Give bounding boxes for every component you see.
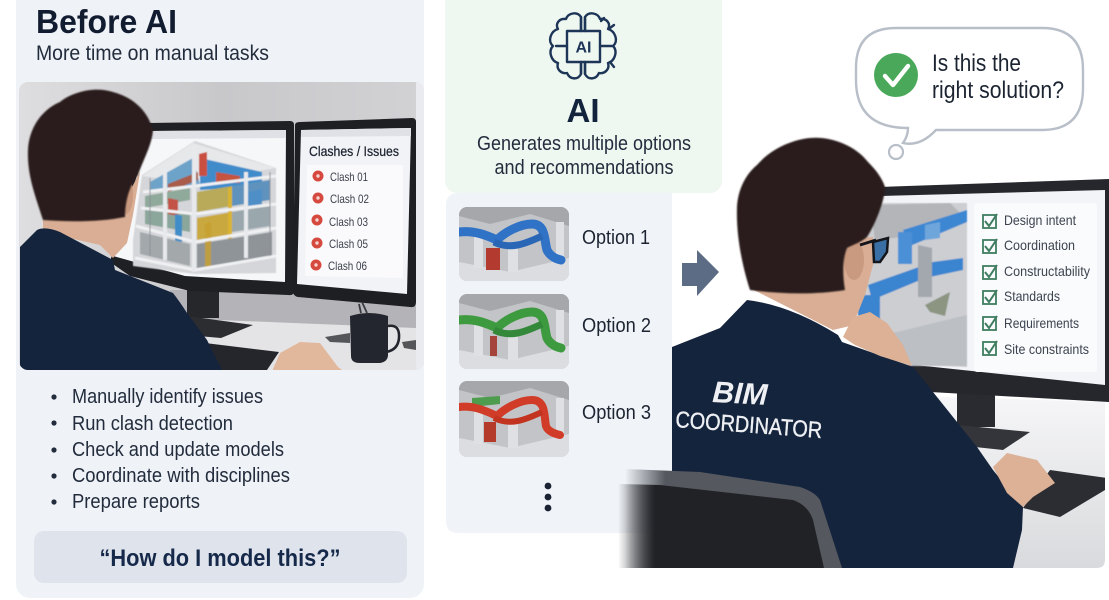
clash list items: Clash 01 — [330, 170, 368, 184]
subheading: manual tasks: More time on manual tasks — [36, 42, 269, 65]
panel: AI — [445, 0, 722, 193]
task list: Coordinate with disciplines — [72, 465, 290, 487]
model view on screen — [858, 203, 967, 367]
person: hand on chin — [843, 312, 912, 366]
AI description: and recommendations — [494, 157, 674, 179]
checklist items: Constructability — [1004, 263, 1090, 279]
main monitor stand — [187, 288, 253, 338]
keyboard — [205, 343, 279, 370]
AI description — [477, 133, 691, 179]
keyboard — [1023, 470, 1107, 517]
office chair — [618, 469, 842, 568]
checklist items: Site constraints — [1004, 341, 1089, 357]
person: shirt — [672, 300, 1023, 568]
arrow — [682, 250, 719, 296]
task list: Run clash detection — [72, 413, 233, 435]
person: neck and face — [750, 237, 873, 330]
monitor: building model — [110, 121, 294, 295]
person: hand on keyboard — [993, 453, 1055, 507]
desk — [938, 397, 1105, 568]
floor slabs — [135, 176, 276, 270]
option 3 label: Option 3 — [582, 402, 651, 424]
icon: AI brain — [550, 13, 616, 78]
hand on mouse — [273, 342, 342, 370]
clash list items: Clash 02 — [330, 192, 369, 206]
clash list items — [310, 170, 369, 273]
person: shirt — [20, 228, 222, 370]
photo: coordinator at dual monitors — [19, 82, 424, 370]
panel: before AI — [16, 0, 424, 598]
desk — [170, 290, 416, 370]
3D building — [133, 141, 276, 274]
task list: Check and update models — [72, 439, 284, 461]
option 2 thumbnail — [459, 294, 569, 369]
monitor: clashes list — [293, 118, 416, 307]
quote callout: “How do I model this?” — [100, 545, 340, 572]
clashes title: Clashes / Issues — [309, 143, 399, 159]
glasses — [860, 238, 888, 262]
option 1 thumbnail — [459, 207, 569, 281]
jacket text: BIM: BIM — [712, 376, 769, 412]
person: ear — [844, 240, 864, 280]
clash list items: Clash 06 — [328, 259, 367, 273]
checklist items — [983, 212, 1090, 357]
checklist items: Design intent — [1004, 212, 1076, 228]
photo: BIM coordinator reviewing options — [618, 138, 1109, 568]
icon: green check — [874, 53, 918, 97]
AI description: Generates multiple options — [477, 133, 691, 155]
checklist items: Standards — [1004, 288, 1060, 304]
monitor stand — [957, 390, 1030, 450]
person: ear — [125, 184, 133, 214]
jacket text: COORDINATOR: COORDINATOR — [675, 406, 823, 443]
person: hair — [737, 138, 885, 293]
task list: Prepare reports — [72, 491, 200, 513]
question text — [932, 50, 1064, 104]
task list — [51, 386, 290, 513]
panel: options — [446, 193, 672, 533]
checklist items: Requirements — [1004, 315, 1079, 331]
desk accessories — [325, 333, 416, 350]
heading: before AI: Before AI — [36, 3, 177, 40]
more options dots — [545, 483, 551, 511]
icon: AI brain: AI — [576, 40, 592, 56]
monitor: checklist — [858, 179, 1109, 402]
heading: AI: AI — [566, 92, 600, 129]
option 3 thumbnail — [459, 381, 569, 457]
person: hair — [28, 90, 153, 221]
person: neck and ear — [43, 172, 140, 258]
coffee mug — [350, 302, 399, 363]
checklist items: Coordination — [1004, 237, 1075, 253]
question text: right solution? — [932, 77, 1064, 104]
quote callout — [34, 531, 407, 583]
clash list items: Clash 05 — [329, 237, 368, 251]
task list: Manually identify issues — [72, 386, 263, 408]
speech bubble — [856, 28, 1083, 159]
question text: Is this the — [932, 50, 1021, 77]
option 1 label: Option 1 — [582, 227, 650, 249]
option 2 label: Option 2 — [582, 315, 651, 337]
clash list items: Clash 03 — [329, 215, 368, 229]
